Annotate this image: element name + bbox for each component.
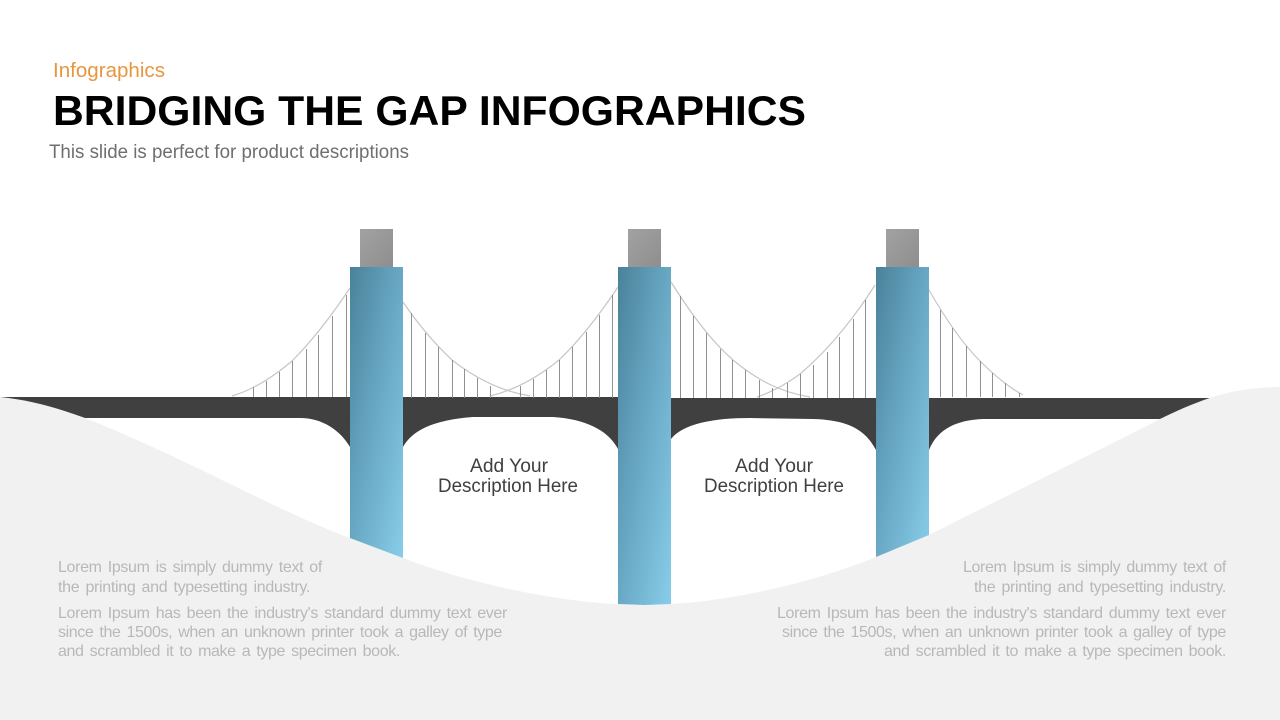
cable: right of tower two <box>671 282 810 397</box>
tower three column <box>876 267 929 557</box>
subtitle: This slide is perfect for product descriptions <box>49 142 409 163</box>
left text block: Lorem Ipsum has been the industry's standard dummy text ever <box>58 605 508 622</box>
left text block: since the 1500s, when an unknown printer took a galley of type <box>58 624 502 641</box>
tower one column <box>350 267 403 558</box>
tower two cap <box>628 229 661 267</box>
bridge deck <box>0 397 1215 450</box>
tower three cap <box>886 229 919 267</box>
right text block: Lorem Ipsum is simply dummy text of <box>963 559 1227 576</box>
tower one cap <box>360 229 393 267</box>
description label one: Add Your <box>470 456 549 477</box>
left text block: Lorem Ipsum is simply dummy text of <box>58 559 323 576</box>
right text block: Lorem Ipsum has been the industry's standard dummy text ever <box>777 605 1227 622</box>
tower two <box>618 229 671 605</box>
cable: left of tower three <box>757 285 875 397</box>
tower one <box>350 229 403 558</box>
cable: right of tower three <box>929 290 1023 395</box>
description label one: Description Here <box>438 476 578 497</box>
description label two: Description Here <box>704 476 844 497</box>
right text block <box>777 559 1227 660</box>
tower three <box>876 229 929 557</box>
suspension cables <box>232 282 1023 397</box>
main heading: BRIDGING THE GAP INFOGRAPHICS <box>53 87 806 134</box>
right text block: the printing and typesetting industry. <box>974 579 1226 596</box>
description label two: Add Your <box>735 456 814 477</box>
left text block: the printing and typesetting industry. <box>58 579 310 596</box>
cable: right of tower one <box>403 302 530 396</box>
right text block: and scrambled it to make a type specimen book. <box>884 643 1226 660</box>
title block <box>49 60 806 163</box>
cable: left of tower one <box>232 288 350 396</box>
right text block: since the 1500s, when an unknown printer took a galley of type <box>782 624 1226 641</box>
vertical hangers <box>254 295 1020 398</box>
tower two column <box>618 267 671 605</box>
cable: left of tower two <box>490 287 618 396</box>
left text block <box>58 559 508 660</box>
ground hills <box>0 387 1280 720</box>
left text block: and scrambled it to make a type specimen book. <box>58 643 400 660</box>
eyebrow label: Infographics <box>53 60 165 82</box>
